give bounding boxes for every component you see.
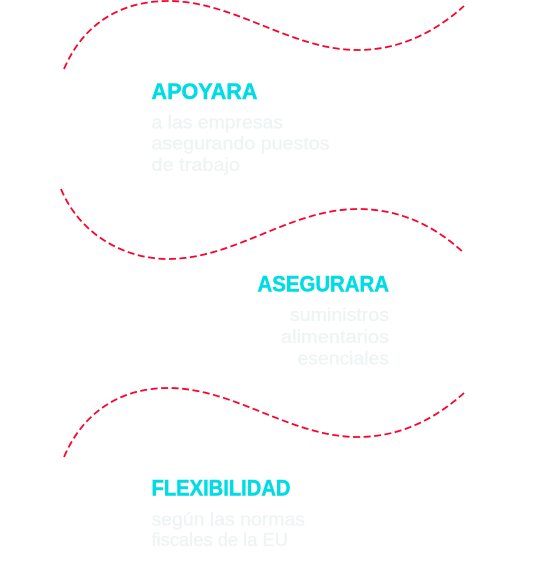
text block: asegurara description: suministros [290, 305, 389, 325]
text block: flexibilidad description: según las normas [152, 510, 305, 530]
dashed wave 2 [61, 189, 464, 259]
text block: apoyara description [152, 113, 330, 175]
section: asegurara [258, 272, 389, 368]
dashed wave 3 [64, 388, 464, 457]
heading: asegurara: ASEGURARA [258, 272, 389, 297]
text block: flexibilidad description [152, 510, 305, 550]
text block: asegurara description [281, 305, 389, 368]
dashed wave 1 [64, 1, 464, 69]
heading: apoyara: APOYARA [152, 79, 258, 104]
text block: apoyara description: asegurando puestos [152, 134, 330, 154]
section: flexibilidad [152, 476, 305, 550]
heading: flexibilidad: FLEXIBILIDAD [152, 476, 290, 501]
section: apoyara [152, 79, 330, 175]
text block: apoyara description: de trabajo [152, 155, 240, 175]
text block: asegurara description: esenciales [298, 348, 389, 368]
text block: asegurara description: alimentarios [281, 327, 389, 347]
text block: flexibilidad description: fiscales de la EU [152, 530, 288, 550]
text block: apoyara description: a las empresas [152, 113, 283, 133]
